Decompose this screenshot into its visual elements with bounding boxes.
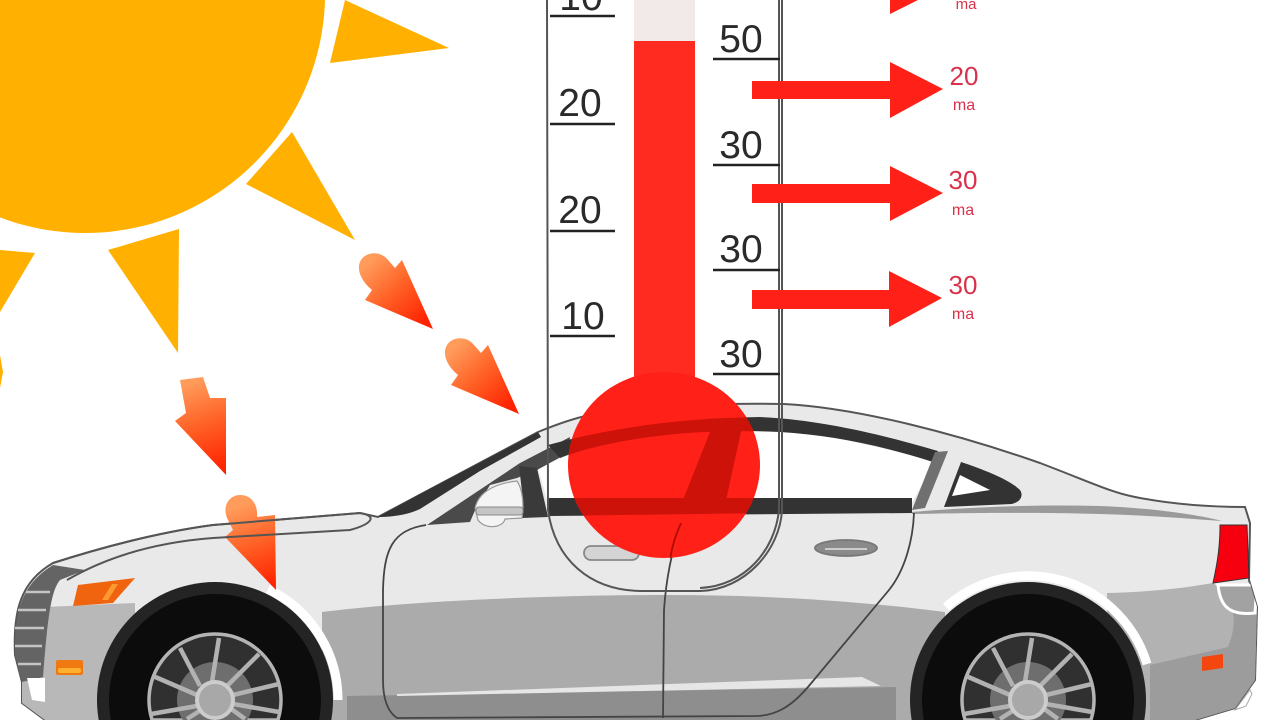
mercury column bbox=[634, 0, 695, 41]
right scale labels: 30 bbox=[719, 228, 763, 271]
icon: sun ray arrow over hood bbox=[225, 495, 276, 590]
arrow value labels: ma bbox=[952, 306, 974, 323]
car bbox=[10, 404, 1262, 720]
left scale labels bbox=[558, 0, 605, 338]
mirror bbox=[475, 481, 523, 527]
arrow value labels bbox=[949, 0, 978, 323]
red arrows bbox=[752, 0, 943, 327]
left scale labels: 10 bbox=[561, 295, 605, 338]
icon: sun bbox=[0, 0, 449, 388]
right scale ticks bbox=[713, 59, 780, 374]
arrow value labels: 30 bbox=[949, 165, 977, 195]
left scale ticks bbox=[550, 16, 615, 336]
right scale labels: 50 bbox=[719, 18, 763, 61]
front wheel bbox=[97, 582, 333, 720]
icon: sun rays arrows upper bbox=[175, 253, 519, 475]
arrow value labels: 30 bbox=[949, 270, 977, 300]
arrow value labels: ma bbox=[953, 97, 975, 114]
bulb bbox=[568, 372, 760, 558]
hood lines bbox=[53, 513, 371, 580]
thermometer bbox=[547, 0, 782, 591]
right scale labels bbox=[719, 18, 763, 376]
arrow value labels: ma bbox=[952, 202, 974, 219]
left scale labels: 20 bbox=[558, 189, 602, 232]
front details bbox=[15, 565, 135, 702]
right scale labels: 30 bbox=[719, 124, 763, 167]
right scale labels: 30 bbox=[719, 333, 763, 376]
car body bbox=[15, 404, 1257, 720]
left scale labels: 20 bbox=[558, 82, 602, 125]
rear details bbox=[1202, 525, 1252, 710]
windows bbox=[378, 417, 1022, 527]
lower body shading bbox=[10, 505, 1262, 720]
rear wheel bbox=[910, 582, 1146, 720]
wheel arches bbox=[268, 576, 1147, 700]
arrow value labels: 20 bbox=[950, 61, 978, 91]
door lines and handles bbox=[383, 513, 914, 718]
thermometer tube outline bbox=[547, 0, 782, 591]
